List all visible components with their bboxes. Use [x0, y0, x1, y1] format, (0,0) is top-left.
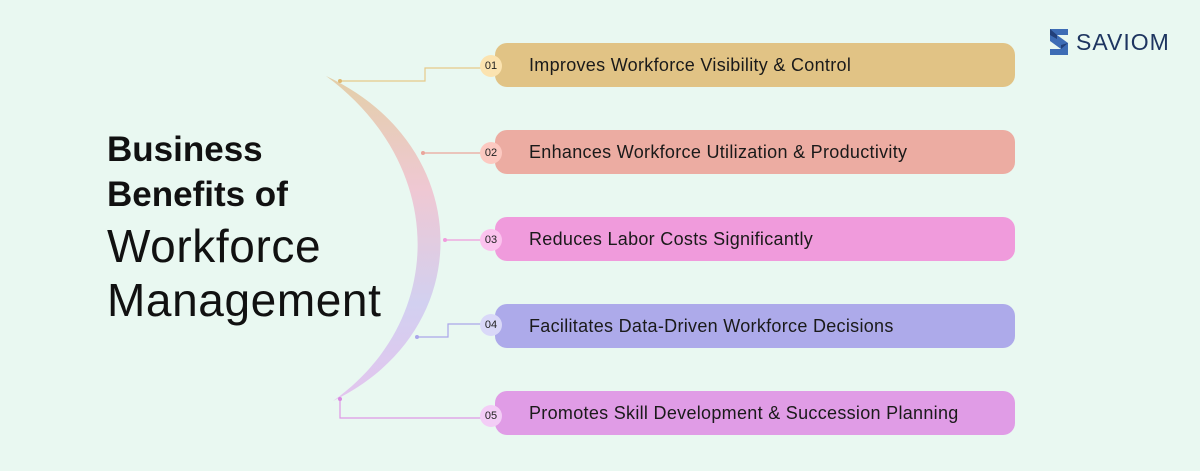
item 3 — [480, 217, 1015, 261]
item 4 — [480, 304, 1015, 348]
text: Facilitates Data-Driven Workforce Decisions — [529, 316, 894, 336]
item 5 — [480, 391, 1015, 435]
text: 02 — [485, 147, 497, 159]
title — [107, 130, 382, 326]
text: Enhances Workforce Utilization & Productivity — [529, 142, 907, 162]
title: Management — [107, 274, 382, 326]
item 1 — [480, 43, 1015, 87]
logo: SAVIOM — [1076, 28, 1170, 54]
text: Promotes Skill Development & Succession Planning — [529, 402, 959, 422]
title: Workforce — [107, 220, 321, 272]
title: Benefits of — [107, 175, 288, 214]
text: 04 — [485, 319, 497, 331]
item 2 — [480, 130, 1015, 174]
text: 05 — [485, 410, 497, 422]
text: 01 — [485, 60, 497, 72]
title: Business — [107, 130, 263, 169]
text: Reduces Labor Costs Significantly — [529, 228, 813, 248]
text: Improves Workforce Visibility & Control — [529, 54, 851, 74]
text: 03 — [485, 234, 497, 246]
